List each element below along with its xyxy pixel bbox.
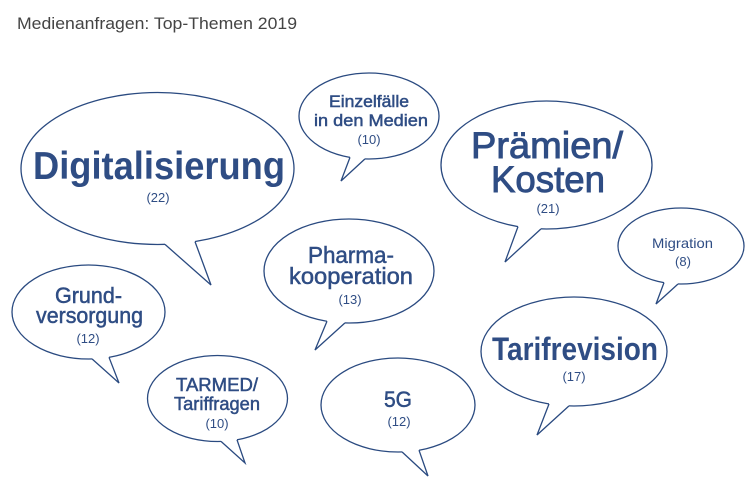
bubble: Digitalisierung — [21, 92, 294, 285]
bubble: Prämien/Kosten: Prämien/ — [471, 125, 624, 166]
bubble: Prämien/Kosten — [441, 101, 652, 262]
bubble: Tarifrevision: Tarifrevision — [492, 331, 658, 367]
bubble: Digitalisierung: (22) — [146, 190, 170, 205]
bubble: TARMED/Tariffragen: Tariffragen — [174, 394, 260, 414]
title: Medienanfragen: Top-Themen 2019 — [17, 14, 297, 33]
bubble: Digitalisierung: Digitalisierung — [33, 145, 285, 188]
bubble: 5G — [321, 358, 475, 476]
bubble: Prämien/Kosten: Kosten — [491, 159, 605, 200]
bubble: TARMED/Tariffragen — [148, 356, 288, 463]
bubble: Migration: (8) — [675, 254, 691, 269]
bubble: Migration: Migration — [652, 235, 713, 251]
bubble: TARMED/Tariffragen: (10) — [205, 416, 229, 431]
bubble: Grundversorgung: (12) — [76, 331, 100, 346]
bubble: TARMED/Tariffragen: TARMED/ — [176, 375, 258, 395]
bubble: Grundversorgung: Grund- — [55, 283, 122, 308]
bubble: Pharmakooperation: kooperation — [289, 263, 413, 289]
bubble: 5G: 5G — [384, 387, 412, 412]
bubble: Einzelfälle in den Medien: Einzelfälle — [329, 92, 409, 111]
bubble: Tarifrevision — [481, 297, 667, 435]
bubble: Pharmakooperation: (13) — [338, 292, 362, 307]
bubble: 5G: (12) — [387, 414, 411, 429]
bubble: Pharmakooperation — [264, 219, 434, 350]
bubble: Pharmakooperation: Pharma- — [308, 242, 394, 268]
bubble: Einzelfälle in den Medien — [299, 73, 439, 181]
bubble: Einzelfälle in den Medien: (10) — [357, 132, 381, 147]
bubble: Prämien/Kosten: (21) — [536, 201, 560, 216]
bubble: Einzelfälle in den Medien: in den Medien — [314, 111, 428, 130]
bubble: Migration — [618, 208, 744, 304]
bubble: Grundversorgung — [12, 265, 165, 383]
bubble: Tarifrevision: (17) — [562, 369, 586, 384]
bubble: Grundversorgung: versorgung — [36, 303, 143, 328]
